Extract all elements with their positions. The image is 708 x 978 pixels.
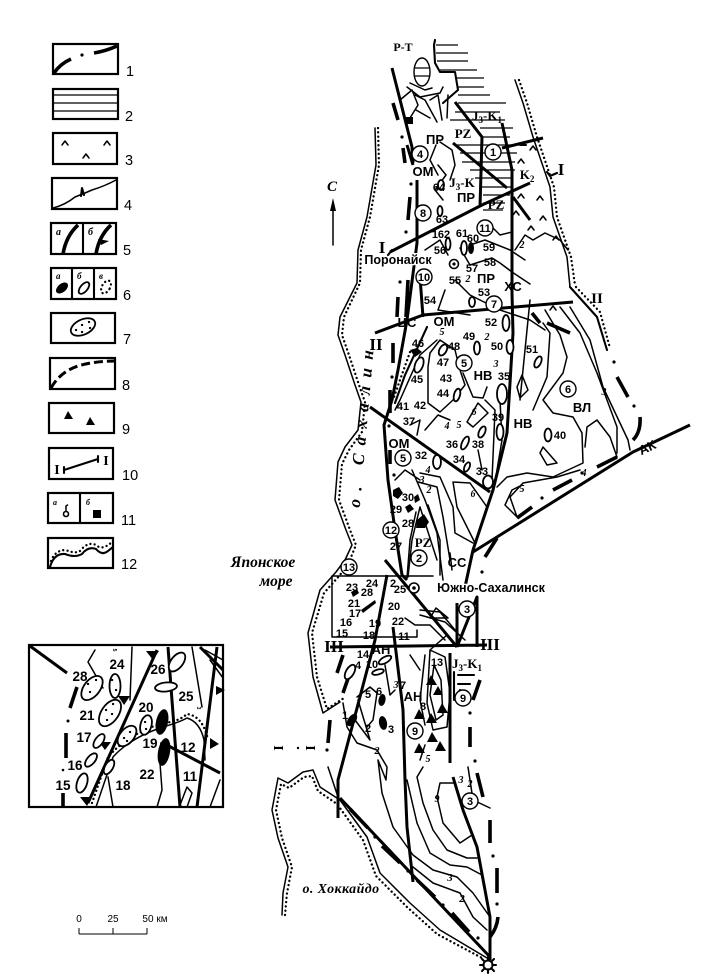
legend 6: ore bodies xyxy=(51,268,131,304)
sea label: Японское xyxy=(230,554,295,571)
main map: contour values: 2 xyxy=(464,274,470,285)
legend 10: section line: 10 xyxy=(122,468,138,484)
main map: geological unit labels: ВЛ xyxy=(573,400,591,415)
main map: geological unit labels: 3 xyxy=(456,182,461,192)
scale bar: 25 xyxy=(107,914,119,925)
main map: deposit numbers: 53 xyxy=(478,287,490,299)
main map: contour values: 6 xyxy=(472,407,476,418)
main map: deposit numbers: 45 xyxy=(411,374,423,386)
main map: box around inset area xyxy=(332,576,433,637)
main map: geological unit labels: K xyxy=(520,167,530,182)
main map: deposit numbers: 28 xyxy=(361,587,373,599)
main map: deposit numbers: 58 xyxy=(484,257,496,269)
main map: deposit numbers xyxy=(336,182,566,736)
main map: geological unit labels: PZ xyxy=(455,126,472,141)
main map: geological unit labels: II xyxy=(591,291,603,307)
main map: deposit numbers: 37 xyxy=(403,416,415,428)
main map: contour values: 2 xyxy=(458,893,465,905)
main map: deposit numbers: 15 xyxy=(336,628,348,640)
main map: contour values: 2 xyxy=(466,779,472,790)
inset dotted coastline arc xyxy=(92,714,208,807)
main map: deposit numbers: 1 xyxy=(342,710,348,722)
main map: contour values: 3 xyxy=(392,680,398,691)
main map: contour values: 5 xyxy=(440,327,444,338)
legend 7: dotted ellipse: 7 xyxy=(123,332,131,348)
main map: deposit numbers: 2 xyxy=(390,578,396,590)
inset labels: 11 xyxy=(183,769,198,784)
main map: contour values: 4 xyxy=(444,421,450,432)
main map: dash-dot boundary xyxy=(325,135,640,940)
main map: contour values: 3 xyxy=(418,475,424,486)
inset labels: 28 xyxy=(72,669,88,684)
main map: deposit numbers: 47 xyxy=(437,357,449,369)
main map: deposit numbers: 17 xyxy=(349,608,361,620)
main map: numbered circles: 9 xyxy=(460,693,466,705)
main map: numbered circles: 3 xyxy=(467,796,473,808)
inset labels: 15 xyxy=(55,778,71,793)
inset labels: 16 xyxy=(67,758,83,773)
main map: contours xyxy=(328,83,630,930)
main map: geological unit labels: ПР xyxy=(457,190,475,205)
main map: deposit numbers: 35 xyxy=(498,371,510,383)
main map: contour values: 9 xyxy=(434,794,440,805)
main map: deposit numbers: 41 xyxy=(397,401,409,413)
legend 11: symbols xyxy=(48,493,136,529)
main map: contour values: 3 xyxy=(600,387,606,398)
legend 10: section line: I xyxy=(103,454,109,469)
main map: contour values: 3 xyxy=(458,775,464,786)
main map: deposit numbers: 63 xyxy=(436,214,448,226)
main map: geological unit labels: СС xyxy=(448,555,467,570)
inset labels: 17 xyxy=(76,730,92,745)
main map: geological unit labels: 1 xyxy=(477,663,482,673)
main map: contour values: 5 xyxy=(456,420,462,431)
inset labels: 21 xyxy=(79,708,95,723)
main map: deposit numbers: 16 xyxy=(340,617,352,629)
scale bar xyxy=(76,914,168,934)
main map: deposit numbers: 23 xyxy=(346,582,358,594)
main map: geological unit labels: PZ xyxy=(488,197,505,212)
main map: geological unit labels: НВ xyxy=(514,416,532,431)
legend 5: faults a and б: 5 xyxy=(123,243,131,259)
legend 5: faults a and б: а xyxy=(56,227,61,238)
inset labels: 20 xyxy=(138,700,154,715)
main map: deposit numbers: 40 xyxy=(554,430,566,442)
legend 6: ore bodies: а xyxy=(56,271,61,281)
scale bar: 50 км xyxy=(142,914,168,925)
main map: contour values: 4 xyxy=(424,465,430,476)
main map: deposit numbers: 64 xyxy=(433,182,446,194)
main map: deposit numbers: 25 xyxy=(394,584,406,596)
main map: deposit numbers: 27 xyxy=(390,541,402,553)
main map: deposit numbers: 5 xyxy=(365,689,371,701)
main map: deposit numbers: 46 xyxy=(412,338,424,350)
main map: place names: о. Хоккайдо xyxy=(302,882,380,897)
legend 9: triangles xyxy=(49,403,130,438)
main map: contour values: 5 xyxy=(426,754,430,765)
main map: section line ticks xyxy=(388,145,557,255)
main map: contour values: 2 xyxy=(374,746,380,757)
legend 6: ore bodies: б xyxy=(77,271,82,281)
main map: deposit numbers: 54 xyxy=(424,295,437,307)
main map: geological unit labels: -K xyxy=(483,108,498,123)
main map: place names: Поронайск xyxy=(364,253,432,267)
main map: geological unit labels xyxy=(270,40,658,751)
main map: geological unit labels: ПР xyxy=(477,271,495,286)
main map: deposit numbers: 28 xyxy=(402,518,414,530)
main map: contour values: 3 xyxy=(446,872,453,884)
main map: numbered circles: 11 xyxy=(479,223,491,235)
main map: deposit numbers: 18 xyxy=(363,630,375,642)
main map: numbered circles: 10 xyxy=(418,272,430,284)
main map: deposit numbers: 56 xyxy=(434,245,446,257)
main map: deposit numbers: 162 xyxy=(432,229,450,241)
main map: deposit numbers: 10 xyxy=(366,659,378,671)
main map: deposit numbers: 13 xyxy=(431,657,443,669)
main map: deposit numbers: 2 xyxy=(365,723,371,735)
main map: geological unit labels: I xyxy=(270,745,285,751)
main map: geological unit labels: J xyxy=(449,175,456,190)
main map: place names xyxy=(302,253,546,897)
main map: contour values: 5 xyxy=(520,484,524,495)
main map: faults xyxy=(330,68,690,960)
legend 11: symbols: б xyxy=(86,498,91,507)
north arrow xyxy=(327,179,338,245)
inset map xyxy=(29,645,225,807)
main map: coastlines xyxy=(272,80,610,958)
main map: deposit numbers: 50 xyxy=(491,341,503,353)
main map: geological unit labels: -K xyxy=(460,175,476,190)
main map: contour values: 2 xyxy=(518,240,524,251)
inset labels: 18 xyxy=(115,778,131,793)
legend 2: horizontal hatching xyxy=(53,89,133,125)
main map: geological unit labels: III xyxy=(324,637,344,656)
inset labels: 12 xyxy=(180,740,196,755)
main map: numbered circles: 1 xyxy=(490,147,496,159)
legend 11: symbols: а xyxy=(53,498,57,507)
main map: contour values: 2 xyxy=(484,332,490,343)
main map: place names: Южно-Сахалинск xyxy=(437,581,546,595)
main map: numbered circles: 2 xyxy=(416,553,422,565)
main map: geological unit labels: ХС xyxy=(504,279,522,294)
main map: numbered circles: 4 xyxy=(417,149,424,161)
main map: numbered circles: 8 xyxy=(420,208,426,220)
legend 10: section line xyxy=(49,448,138,484)
main map: deposit ellipses xyxy=(343,180,552,731)
main map: deposit numbers: 60 xyxy=(467,233,479,245)
inset labels xyxy=(55,649,201,793)
main map: geological unit labels: ОМ xyxy=(389,436,409,451)
legend 3: volcanic marks: 3 xyxy=(125,153,133,169)
legend 8: dashed curve: 8 xyxy=(122,378,130,394)
main map: numbered circles: 3 xyxy=(464,604,470,616)
legend 4: line with arrow: 4 xyxy=(124,198,132,214)
main map: deposit numbers: 44 xyxy=(437,388,450,400)
main map: deposit numbers: 8 xyxy=(420,701,426,713)
main map: geological unit labels: P-T xyxy=(393,40,413,54)
main map: geological unit labels: -K xyxy=(463,656,478,671)
scale bar: 0 xyxy=(76,914,82,925)
sea label: море xyxy=(258,573,293,590)
main map: geological unit labels: III xyxy=(480,635,500,654)
main map: deposit numbers: 49 xyxy=(463,331,475,343)
main map: deposit numbers: 55 xyxy=(449,275,461,287)
main map: geological unit labels: ОМ xyxy=(434,314,454,329)
main map: geological unit labels: ЦС xyxy=(398,315,417,330)
main map: city markers xyxy=(409,260,458,593)
main map: numbered circles: 5 xyxy=(400,453,406,465)
main map: geological unit labels: АК xyxy=(636,437,658,458)
legend 4: line with arrow xyxy=(52,178,132,214)
main map: numbered circles xyxy=(341,144,576,809)
main map: contour values: 4 xyxy=(580,468,586,479)
legend 1: dash-dot boundary xyxy=(53,44,134,80)
main map: deposit numbers: 42 xyxy=(414,400,426,412)
legend panel xyxy=(48,44,138,573)
main map: geological unit labels: 3 xyxy=(459,663,464,673)
legend 8: dashed curve xyxy=(50,358,130,394)
main map: deposit numbers: 11 xyxy=(398,631,410,643)
main map: geological unit labels: J xyxy=(452,656,459,671)
main map: deposit numbers: 14 xyxy=(357,649,370,661)
main map: deposit numbers: 6 xyxy=(376,686,382,698)
main map: contour values: 3 xyxy=(492,359,498,370)
main map: deposit numbers: 51 xyxy=(526,344,538,356)
inset labels: 5 xyxy=(111,649,117,652)
main map: contour values: 6 xyxy=(470,489,476,500)
main map: deposit numbers: 30 xyxy=(402,492,414,504)
main map: deposit numbers: 39 xyxy=(492,412,504,424)
legend 6: ore bodies: 6 xyxy=(123,288,131,304)
main map: place names: о. Сахалин xyxy=(345,341,378,508)
main map: numbered circles: 6 xyxy=(565,384,571,396)
main map: deposit numbers: 19 xyxy=(369,618,381,630)
main map: volcanic marks xyxy=(513,146,559,310)
main map: deposit numbers: 3 xyxy=(388,724,394,736)
north arrow: С xyxy=(327,179,338,195)
main map: numbered circles: 12 xyxy=(385,525,397,537)
main map: numbered circles: 5 xyxy=(461,358,467,370)
legend 10: section line: I xyxy=(54,463,60,478)
main map: deposit numbers: 61 xyxy=(456,228,468,240)
main map: deposit numbers: 43 xyxy=(440,373,452,385)
main map: geological unit labels: I xyxy=(558,160,565,179)
inset labels: 24 xyxy=(109,657,125,672)
main map: contour values: 2 xyxy=(426,485,432,496)
main map: deposit numbers: 32 xyxy=(415,450,427,462)
main map: deposit numbers: 48 xyxy=(448,341,460,353)
sea label xyxy=(230,554,295,590)
main map: deposit numbers: 21 xyxy=(348,598,360,610)
main map: geological unit labels: ОМ xyxy=(413,164,433,179)
legend 2: horizontal hatching: 2 xyxy=(125,109,133,125)
main map: geological unit labels: АН xyxy=(404,689,422,704)
inset faults xyxy=(30,646,225,807)
main map: deposit numbers: 29 xyxy=(390,504,402,516)
main map: deposit numbers: 59 xyxy=(483,242,495,254)
main map: geological unit labels: I xyxy=(379,238,386,257)
legend 9: triangles: 9 xyxy=(122,422,130,438)
main map: deposit numbers: 57 xyxy=(466,263,478,275)
main map: geological unit labels: ПР xyxy=(426,132,444,147)
main map: deposit numbers: 34 xyxy=(453,454,466,466)
main map: numbered circles: 13 xyxy=(343,562,355,574)
main map: deposit numbers: 24 xyxy=(366,578,379,590)
inset labels: 19 xyxy=(142,736,158,751)
legend 5: faults a and б xyxy=(51,223,131,259)
legend 3: volcanic marks xyxy=(53,133,133,169)
main map: geological unit labels: I xyxy=(302,745,317,751)
main map: deposit numbers: 4 xyxy=(355,660,362,672)
main map: geological unit labels: 2 xyxy=(530,174,535,184)
inset labels: 3 xyxy=(195,707,201,710)
main map: deposit numbers: 33 xyxy=(476,466,488,478)
legend 11: symbols: 11 xyxy=(121,513,136,529)
legend 12: coastline: 12 xyxy=(121,557,137,573)
main map: geological unit labels: 1 xyxy=(497,115,502,125)
inset labels: 26 xyxy=(150,662,166,677)
legend 6: ore bodies: в xyxy=(99,271,103,281)
inset ellipses xyxy=(74,650,189,794)
main map: deposit numbers: 7 xyxy=(400,680,406,692)
gear symbol at southern tip xyxy=(480,957,496,973)
legend 12: coastline xyxy=(48,538,137,573)
legend 1: dash-dot boundary: 1 xyxy=(126,64,134,80)
main map: numbered circles: 7 xyxy=(491,299,497,311)
legend 7: dotted ellipse xyxy=(51,313,131,348)
main map: geological unit labels: PZ xyxy=(415,535,432,550)
main map: deposit numbers: 22 xyxy=(392,616,404,628)
main map: deposit numbers: 20 xyxy=(388,601,400,613)
legend 5: faults a and б: б xyxy=(88,227,94,238)
main map: deposit numbers: 52 xyxy=(485,317,497,329)
main map: contour values xyxy=(374,240,606,905)
main map: deposit numbers: 38 xyxy=(472,439,484,451)
inset labels: 25 xyxy=(178,689,194,704)
main map: geological unit labels: 3 xyxy=(479,115,484,125)
main map: solid symbols xyxy=(351,117,448,753)
main map: numbered circles: 9 xyxy=(412,726,418,738)
inset labels: 22 xyxy=(139,767,155,782)
main map: geological unit labels: II xyxy=(369,335,383,354)
main map: geological unit labels: J xyxy=(472,108,479,123)
main map: geological unit labels: АН xyxy=(372,642,390,657)
main map: geological unit labels: НВ xyxy=(474,368,492,383)
main map: hatching xyxy=(414,40,517,210)
main map: deposit numbers: 36 xyxy=(446,439,458,451)
